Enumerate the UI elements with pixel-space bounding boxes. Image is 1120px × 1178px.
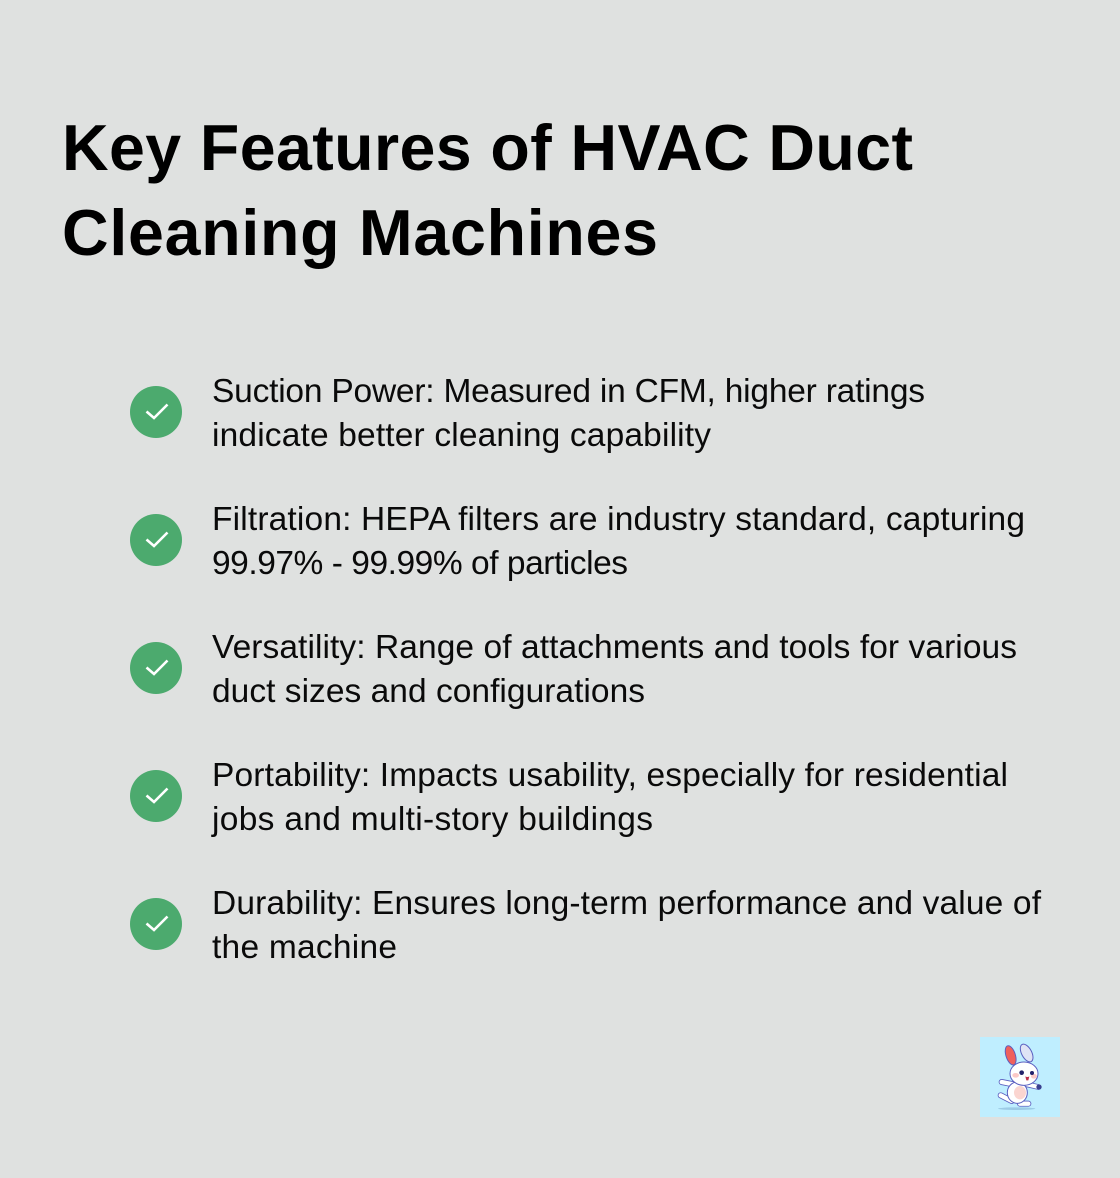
- item: filtration: [130, 501, 1025, 582]
- icon: rabbit logo: [980, 1037, 1060, 1117]
- title: Cleaning Machines: [62, 197, 658, 269]
- text: durability: Durability: Ensures long-term performance and value of: [212, 885, 1042, 922]
- icon: check circle: [130, 642, 182, 694]
- text: suction power: indicate better cleaning capability: [212, 417, 711, 454]
- text: filtration: 99.97% - 99.99% of particles: [212, 545, 628, 582]
- icon: check circle: [130, 770, 182, 822]
- title: Key Features of HVAC Duct: [62, 112, 913, 184]
- item: suction power: [130, 373, 925, 454]
- icon: check circle: [130, 386, 182, 438]
- text: versatility: Versatility: Range of attachments and tools for various: [212, 629, 1017, 666]
- icon: check circle: [130, 898, 182, 950]
- text: durability: [212, 885, 1042, 966]
- text: versatility: duct sizes and configurations: [212, 673, 645, 710]
- text: versatility: [212, 629, 1017, 710]
- text: portability: Portability: Impacts usability, especially for residential: [212, 757, 1008, 794]
- item: versatility: [130, 629, 1017, 710]
- feature list: [130, 373, 1042, 966]
- item: portability: [130, 757, 1008, 838]
- text: portability: [211, 757, 1008, 838]
- text: durability: the machine: [212, 929, 397, 966]
- icon: check circle: [130, 514, 182, 566]
- text: portability: jobs and multi-story buildings: [211, 801, 653, 838]
- title: [62, 112, 913, 269]
- text: filtration: [212, 501, 1025, 582]
- text: suction power: [212, 373, 925, 454]
- text: suction power: Suction Power: Measured in CFM, higher ratings: [212, 373, 925, 410]
- item: durability: [130, 885, 1042, 966]
- text: filtration: Filtration: HEPA filters are industry standard, capturing: [212, 501, 1025, 538]
